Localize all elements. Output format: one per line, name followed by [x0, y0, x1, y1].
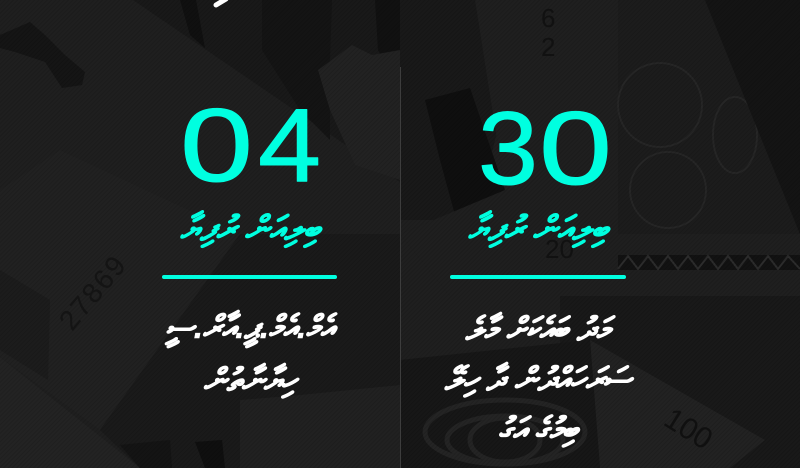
description: ބިމުގެ އަގު	[498, 411, 578, 447]
background: dark banknote collage: 20	[545, 234, 574, 264]
description: އެމް.އެމް.ޕީ.އާރް.ސީ	[166, 309, 334, 345]
background: dark banknote collage: 2	[541, 32, 555, 62]
background: dark banknote collage: 100	[658, 402, 718, 456]
background: dark banknote collage: 27869	[53, 249, 133, 336]
panel: right statistic	[444, 100, 634, 448]
description: މަދު ބައެކަށް މާލެ	[465, 311, 611, 347]
number 30	[478, 100, 612, 200]
number 04	[180, 100, 321, 200]
unit label: ބިލިއަން ރުފިޔާ	[180, 210, 320, 248]
accent rule	[450, 275, 626, 279]
background: dark banknote collage: 6	[541, 3, 555, 33]
description	[444, 311, 634, 448]
unit label: ބިލިއަން ރުފިޔާ	[468, 210, 608, 248]
description: ސަރަހައްދުން ދާ ހިލޭ	[445, 361, 631, 397]
accent rule	[162, 275, 337, 279]
description	[164, 309, 338, 399]
description: ހިޔާނާތުން	[204, 362, 296, 398]
vertical divider	[400, 67, 401, 468]
panel: left statistic	[162, 100, 338, 399]
